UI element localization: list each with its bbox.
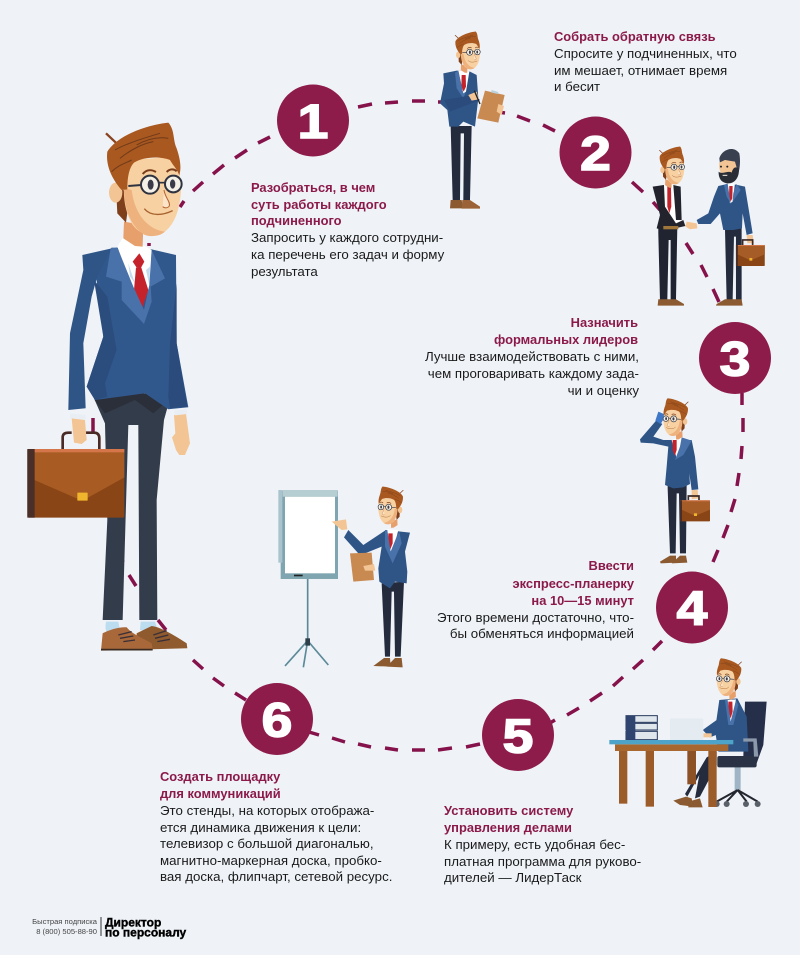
number badge 3 [699,322,771,394]
panel: step 2 [554,29,737,188]
step 6 text: телевизор с большой диагональю, [160,836,374,851]
step 2 text: Собрать обратную связь [554,29,716,44]
panel: step 1 [251,84,445,279]
step 1 text: подчиненного [251,213,342,228]
step 5 text [444,803,641,885]
step 2 text: Спросите у подчиненных, что [554,46,737,61]
footer: subscription contact and logo: 8 (800) 505-88-90 [36,927,97,936]
step 1 text: ка перечень его задач и форму [251,247,445,262]
step 4 text: экспресс-планерку [513,576,635,591]
step 4 text: на 10—15 минут [531,593,634,608]
footer: subscription contact and logo: Быстрая подписка [32,917,98,926]
number badge 5 [482,699,554,771]
step 2 text: им мешает, отнимает время [554,63,727,78]
step 6 text: магнитно-маркерная доска, пробко- [160,853,382,868]
step 6 text [160,769,392,884]
figure: man with clipboard [440,32,505,209]
step 4 text: бы обменяться информацией [450,626,634,641]
step 2 text: и бесит [554,79,600,94]
step 4 text: Этого времени достаточно, что- [437,610,634,625]
step 2 text [554,29,737,94]
number badge 6 [241,683,313,755]
step 3 text: формальных лидеров [494,332,638,347]
panel: step 3 [425,315,771,398]
step 5 text: Установить систему [444,803,574,818]
panel: step 6 [160,683,392,884]
step 1 text [251,180,445,279]
step 5 text: платная программа для руково- [444,854,641,869]
number badge 5: 5 [503,709,533,763]
step 1 text: результата [251,264,318,279]
step 3 text [425,315,639,398]
step 3 text: чем проговаривать каждому зада- [428,366,639,381]
number badge 6: 6 [262,693,292,747]
step 6 text: Создать площадку [160,769,281,784]
step 1 text: суть работы каждого [251,197,387,212]
number badge 2 [560,116,632,188]
step 4 text [437,558,635,641]
panel: step 5 [444,699,641,885]
number badge 2: 2 [580,126,611,180]
panel: step 4 [437,558,728,644]
large businessman with briefcase [27,123,190,651]
step 6 text: Это стенды, на которых отобража- [160,803,374,818]
footer: subscription contact and logo [32,916,187,940]
number badge 1 [277,84,349,156]
footer: subscription contact and logo: Директор [105,916,161,930]
step 1 text: Запросить у каждого сотрудни- [251,230,443,245]
number badge 4 [656,572,728,644]
number badge 1: 1 [298,94,328,148]
footer: subscription contact and logo: по персоналу [105,926,187,940]
step 3 text: чи и оценку [568,383,639,398]
step 1 text: Разобраться, в чем [251,180,375,195]
step 5 text: К примеру, есть удобная бес- [444,837,625,852]
step 3 text: Назначить [571,315,638,330]
figure: man at flipchart [278,487,410,667]
step 5 text: дителей — ЛидерТаск [444,870,582,885]
step 6 text: для коммуникаций [160,786,281,801]
dashed path connecting the steps [93,101,743,750]
step 5 text: управления делами [444,820,572,835]
figure: man on the phone [640,398,710,563]
step 3 text: Лучше взаимодействовать с ними, [425,349,639,364]
number badge 3: 3 [720,332,750,386]
figure: man at desk [609,658,767,807]
figure: handshake of two men [653,147,765,306]
step 4 text: Ввести [589,558,634,573]
step 6 text: ется динамика движения к цели: [160,820,361,835]
step 6 text: вая доска, флипчарт, сетевой ресурс. [160,869,392,884]
number badge 4: 4 [677,581,708,635]
